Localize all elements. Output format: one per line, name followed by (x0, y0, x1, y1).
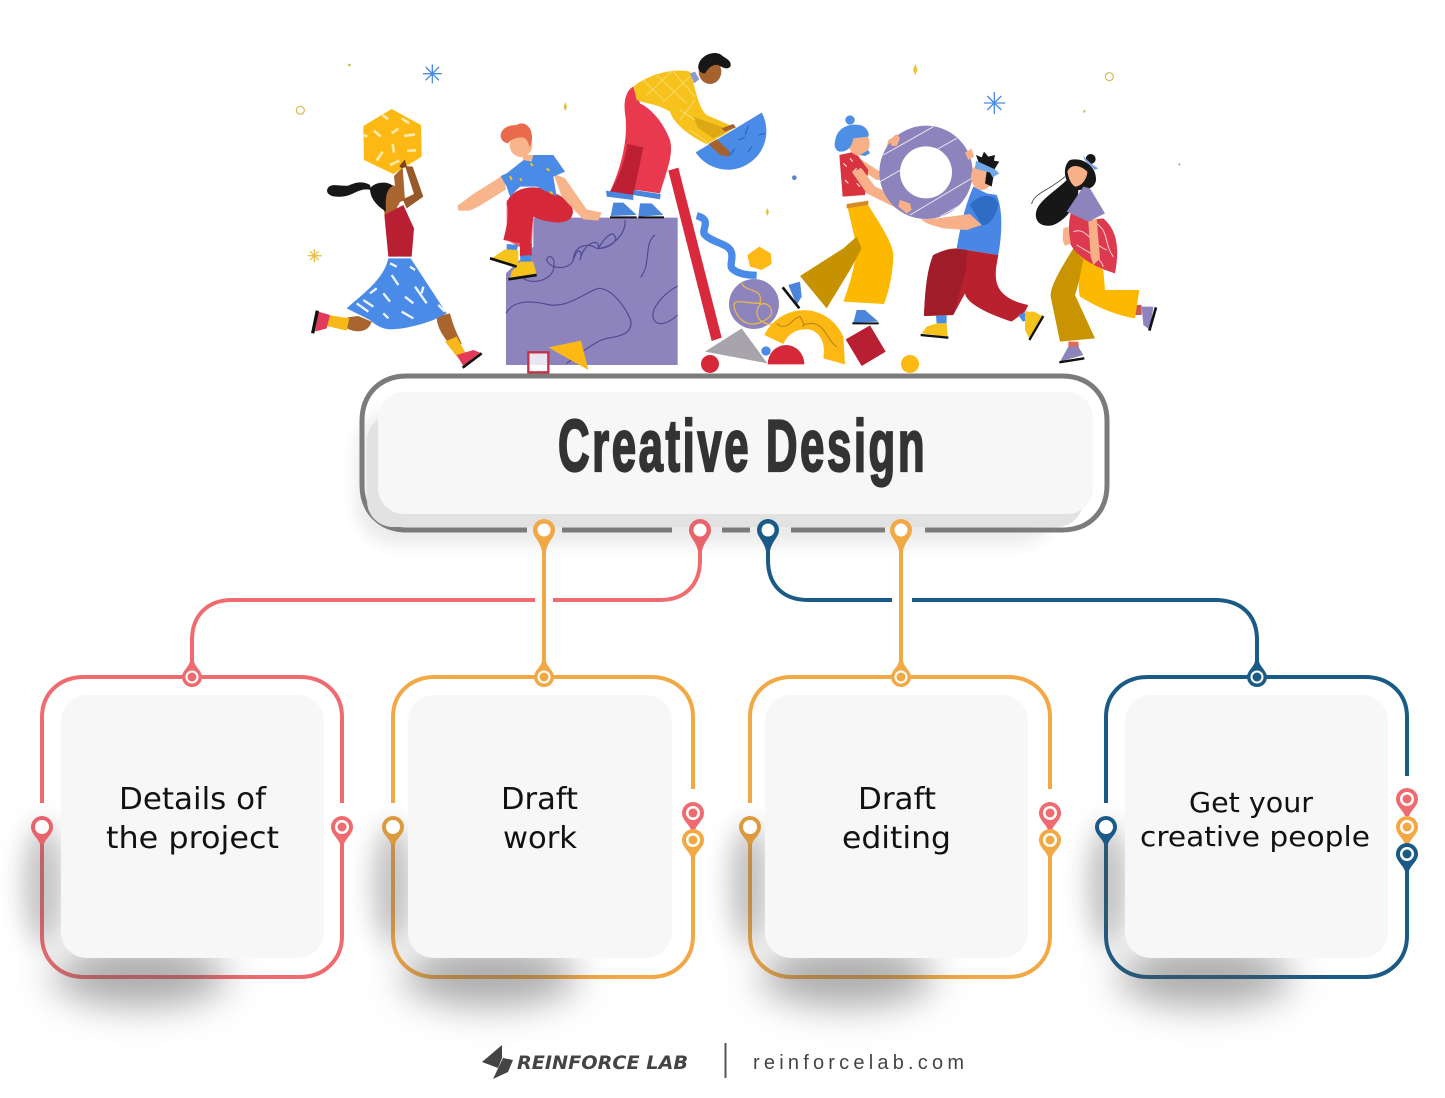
decorative sparkles right (766, 64, 1180, 216)
card face (1125, 695, 1388, 958)
node navy (757, 519, 779, 551)
hand on ring (889, 134, 974, 213)
card shadow (373, 823, 578, 1006)
geometric shapes pile (697, 216, 919, 373)
man carrying ring (921, 152, 1043, 340)
card text: creative people (1140, 820, 1370, 853)
card shadow (24, 823, 228, 1006)
woman carrying ring (783, 115, 912, 323)
card text (842, 782, 951, 856)
node orange 2 (890, 519, 912, 551)
red bar and red outline square, yellow triangle (528, 168, 722, 372)
girl with skirt (313, 166, 482, 368)
divider (724, 1043, 726, 1078)
card nodes (31, 661, 353, 844)
website: reinforcelab.com (753, 1052, 964, 1074)
card text: work (503, 821, 578, 856)
illustration: left group of people (296, 53, 735, 372)
card outline (42, 677, 342, 977)
main title panel (356, 376, 1107, 545)
node pink (689, 519, 711, 551)
card text (106, 782, 279, 856)
card outline (393, 677, 693, 977)
title text: Creative Design (558, 406, 925, 487)
card outline (750, 677, 1050, 977)
connector lines (192, 535, 1257, 677)
node orange 1 (533, 519, 555, 551)
blue half bowl (696, 113, 766, 170)
orange connector left (542, 535, 546, 677)
card face (765, 695, 1028, 958)
card: Draft editing (730, 661, 1061, 1006)
navy connector (768, 535, 1257, 677)
card face (408, 695, 672, 958)
card nodes (739, 661, 1061, 857)
card nodes (382, 661, 704, 857)
orange connector right (899, 535, 903, 677)
card text: editing (842, 821, 951, 856)
brand name: REINFORCE LAB (517, 1052, 688, 1074)
card text: Draft (501, 782, 578, 817)
card shadow (1088, 823, 1293, 1006)
card outline (1106, 677, 1407, 977)
card text: the project (106, 821, 279, 856)
woman walking right (1032, 154, 1156, 362)
card: Get your creative people (1088, 661, 1418, 1006)
footer logo and website (482, 1043, 964, 1079)
yellow hexagon (363, 109, 422, 174)
card text (501, 782, 578, 856)
card face (61, 695, 324, 958)
main panel inner card (378, 392, 1093, 514)
main panel inner shadow (367, 415, 1083, 527)
card: Draft work (373, 661, 704, 1006)
card text: Details of (119, 782, 267, 817)
card text: Get your (1189, 786, 1313, 819)
card text (1140, 786, 1370, 853)
purple block with squiggles (506, 218, 678, 365)
card nodes (1095, 661, 1418, 871)
top panel connector nodes (533, 519, 912, 551)
man standing on block (606, 53, 735, 217)
hands of standing man (708, 124, 736, 157)
decorative sparkles left (296, 64, 567, 262)
illustration: right group of people (696, 64, 1180, 373)
card text: Draft (858, 782, 936, 817)
logo icon (482, 1045, 513, 1079)
card shadow (730, 823, 935, 1006)
purple ring (879, 126, 975, 219)
pink connector (192, 535, 700, 677)
card: Details of the project (24, 661, 353, 1006)
main panel outline (362, 376, 1107, 530)
boy sitting on block (458, 123, 602, 279)
